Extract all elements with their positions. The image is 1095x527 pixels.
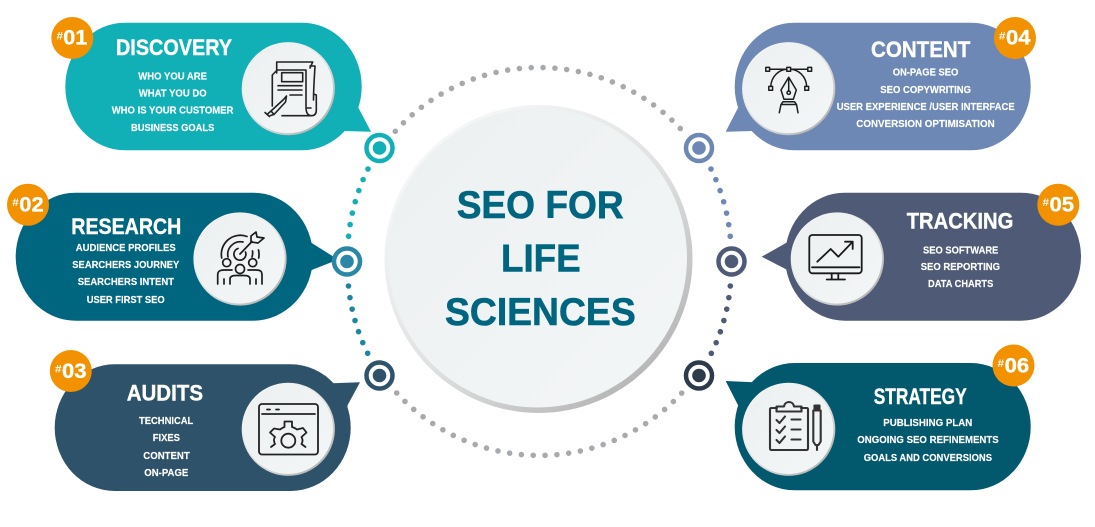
badge 02 bbox=[7, 184, 49, 226]
bubble: research bbox=[16, 193, 337, 321]
bubble: audits bbox=[55, 364, 360, 491]
heading: strategy: STRATEGY bbox=[874, 384, 967, 409]
list: discovery: WHO IS YOUR CUSTOMER bbox=[112, 104, 234, 116]
panel: tracking bbox=[762, 184, 1081, 321]
list: research: SEARCHERS INTENT bbox=[78, 276, 175, 288]
list: tracking: SEO REPORTING bbox=[921, 261, 1000, 273]
badge 01: # bbox=[56, 30, 63, 42]
list: strategy: GOALS AND CONVERSIONS bbox=[864, 452, 992, 464]
badge 03 bbox=[50, 350, 92, 392]
badge 05: 05 bbox=[1050, 194, 1074, 216]
list: discovery: WHO YOU ARE bbox=[138, 70, 207, 82]
list: audits: FIXES bbox=[153, 432, 180, 444]
list: tracking: SEO SOFTWARE bbox=[923, 244, 998, 256]
list: content: USER EXPERIENCE /USER INTERFACE bbox=[837, 101, 1015, 113]
list: content bbox=[837, 66, 1015, 130]
list: research: USER FIRST SEO bbox=[87, 294, 165, 306]
badge 01 bbox=[51, 17, 93, 59]
node: tracking bbox=[718, 248, 744, 274]
list: strategy: PUBLISHING PLAN bbox=[883, 417, 972, 429]
panel: discovery bbox=[51, 17, 371, 150]
list: research bbox=[72, 242, 179, 306]
list: content: ON-PAGE SEO bbox=[893, 66, 958, 78]
badge 05: # bbox=[1042, 197, 1049, 209]
badge 04: # bbox=[999, 30, 1006, 42]
bubble: tracking bbox=[762, 193, 1081, 321]
list: discovery: WHAT YOU DO bbox=[139, 87, 207, 99]
heading: audits: AUDITS bbox=[127, 380, 203, 405]
list: content: SEO COPYWRITING bbox=[880, 84, 971, 96]
badge 04: 04 bbox=[1006, 27, 1031, 50]
bubble: strategy bbox=[726, 363, 1031, 490]
badge 06: # bbox=[998, 358, 1004, 370]
bubble: content bbox=[726, 23, 1031, 150]
icon: target and team bbox=[193, 212, 287, 306]
dotted ring bbox=[348, 68, 730, 455]
panel: content bbox=[726, 17, 1036, 150]
panel: research bbox=[7, 184, 337, 321]
heading: research: RESEARCH bbox=[71, 214, 181, 239]
badge 05 bbox=[1037, 184, 1079, 226]
central circle bbox=[384, 105, 692, 413]
panel: strategy bbox=[726, 344, 1034, 490]
list: audits bbox=[139, 415, 194, 479]
node: audits bbox=[366, 362, 392, 388]
badge 02: # bbox=[12, 197, 19, 209]
heading: discovery: DISCOVERY bbox=[116, 35, 232, 60]
icon: pen tool bbox=[742, 42, 835, 135]
central title: SEO FOR bbox=[457, 184, 624, 227]
badge 03: # bbox=[55, 364, 62, 376]
list: audits: TECHNICAL bbox=[139, 415, 194, 427]
list: tracking: DATA CHARTS bbox=[928, 278, 993, 290]
node: strategy bbox=[686, 362, 712, 388]
central title: LIFE bbox=[501, 237, 581, 280]
heading: tracking: TRACKING bbox=[907, 209, 1013, 234]
node: content bbox=[686, 135, 712, 161]
badge 04 bbox=[994, 17, 1036, 59]
list: content: CONVERSION OPTIMISATION bbox=[856, 118, 995, 130]
list: tracking bbox=[921, 244, 1000, 290]
list: audits: ON-PAGE bbox=[144, 467, 188, 479]
list: research: SEARCHERS JOURNEY bbox=[72, 259, 179, 271]
node: research bbox=[334, 248, 360, 274]
icon: monitor chart bbox=[791, 212, 884, 306]
badge 03: 03 bbox=[62, 360, 86, 383]
panel: audits bbox=[50, 350, 360, 491]
icon: clipboard and pen bbox=[742, 383, 835, 476]
list: discovery bbox=[112, 70, 234, 134]
list: strategy: ONGOING SEO REFINEMENTS bbox=[857, 434, 999, 446]
icon: browser and gear bbox=[242, 383, 335, 476]
heading: content: CONTENT bbox=[871, 37, 971, 62]
node: discovery bbox=[366, 135, 392, 161]
list: research: AUDIENCE PROFILES bbox=[76, 242, 176, 254]
central title: SCIENCES bbox=[445, 291, 636, 334]
list: discovery: BUSINESS GOALS bbox=[131, 122, 214, 134]
badge 01: 01 bbox=[63, 27, 88, 50]
list: strategy bbox=[857, 417, 999, 464]
badge 02: 02 bbox=[19, 194, 44, 216]
badge 06 bbox=[992, 344, 1034, 386]
icon: document and pen bbox=[242, 42, 335, 135]
badge 06: 06 bbox=[1005, 354, 1029, 378]
bubble: discovery bbox=[65, 23, 371, 150]
central title bbox=[445, 184, 636, 334]
list: audits: CONTENT bbox=[143, 450, 190, 462]
